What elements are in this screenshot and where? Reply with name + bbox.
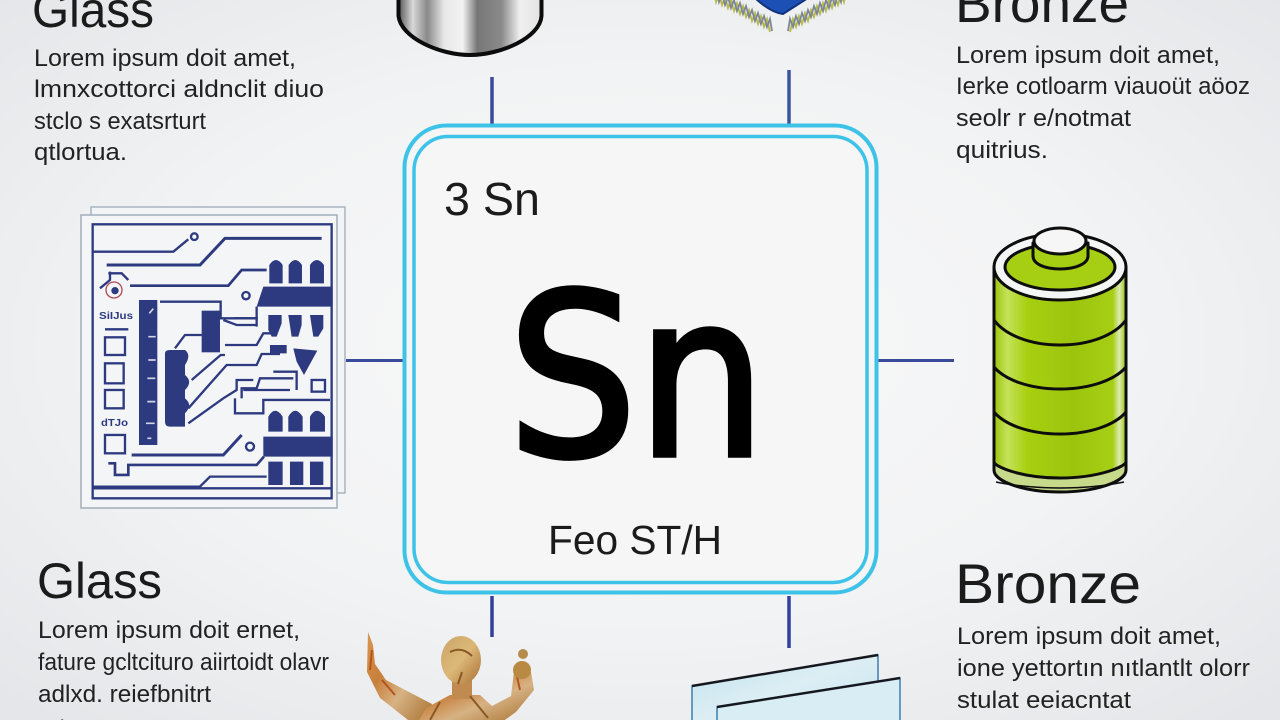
icon: microchip (714, 0, 846, 32)
chip pins right (788, 0, 846, 32)
battery body (994, 267, 1126, 478)
body text: quitrius. (956, 137, 1048, 164)
text block: top left Glass (32, 0, 324, 166)
text block: top right Bronze (955, 0, 1250, 164)
battery top inner (1005, 244, 1115, 290)
statue details (370, 650, 520, 720)
element symbol: Sn (508, 247, 766, 509)
front plate (81, 215, 337, 508)
body text: fature gcltcituro aiirtoidt olavr (38, 649, 329, 676)
body text: Lorem ipsum doit ernet, (38, 617, 300, 644)
body text: Lorem ipsum doit amet, (34, 45, 296, 72)
battery bands (994, 320, 1126, 488)
board label 2: dTJo (101, 418, 128, 429)
body text: ione yettortın nıtlantlt olorr (957, 655, 1250, 682)
statue left arm (367, 632, 432, 720)
icon: metal cylinder (398, 0, 542, 55)
traces and components (93, 224, 333, 498)
heading: Glass: Glass (37, 553, 162, 609)
statue head (441, 636, 481, 684)
chip body (755, 0, 808, 14)
battery terminal neck (1033, 243, 1088, 269)
body text: Lorem ipsum doit amet, (956, 42, 1220, 69)
element caption: Feo ST/H (548, 517, 722, 563)
board label: SiIJus (99, 311, 133, 322)
connector: bottom left (490, 596, 494, 637)
chip pins left (714, 0, 772, 32)
connector: right (878, 359, 954, 362)
icon: battery (994, 228, 1126, 492)
body text: lmnxcottorci aldnclit diuo (34, 76, 324, 103)
battery terminal cap (1034, 228, 1086, 254)
body text: seolr r e/notmat (956, 105, 1131, 132)
back pane (692, 655, 878, 720)
heading: Bronze: Bronze (955, 552, 1141, 615)
icon: circuit board (81, 207, 345, 508)
statue torso and right arm (418, 672, 534, 720)
tile inner border (414, 136, 867, 582)
body text: qtlortua. (34, 139, 127, 166)
statue hand ball (518, 649, 528, 659)
connector: bottom right (787, 596, 791, 648)
body text: adlxd. reiefbnitrt (38, 681, 211, 708)
battery top ring (994, 234, 1126, 300)
back pane top edge (692, 655, 878, 686)
front pane top edge (717, 678, 900, 707)
icon: glass panes (692, 655, 900, 720)
body text: Ierke cotloarm viauoüt aöoz (956, 73, 1250, 100)
body text: Lorem ipsum doit amet, (957, 623, 1221, 650)
text block: bottom left Glass (37, 553, 329, 720)
tile outer border (404, 126, 876, 592)
body text: stulat eeiacntat (957, 687, 1131, 714)
statue fist (513, 661, 531, 679)
body text: stclo s exatsrturt (34, 108, 206, 135)
battery bottom rims (994, 462, 1126, 492)
connector: top right (787, 70, 791, 124)
icon: bronze statue (367, 632, 534, 720)
text block: bottom right Bronze (955, 552, 1250, 714)
panel: tin element tile (404, 126, 876, 592)
front pane (717, 678, 900, 720)
atomic label: 3 Sn (444, 173, 540, 225)
connector: top left (490, 77, 494, 124)
connector: left (346, 359, 403, 362)
statue neck (452, 675, 472, 699)
back plate (91, 207, 345, 493)
